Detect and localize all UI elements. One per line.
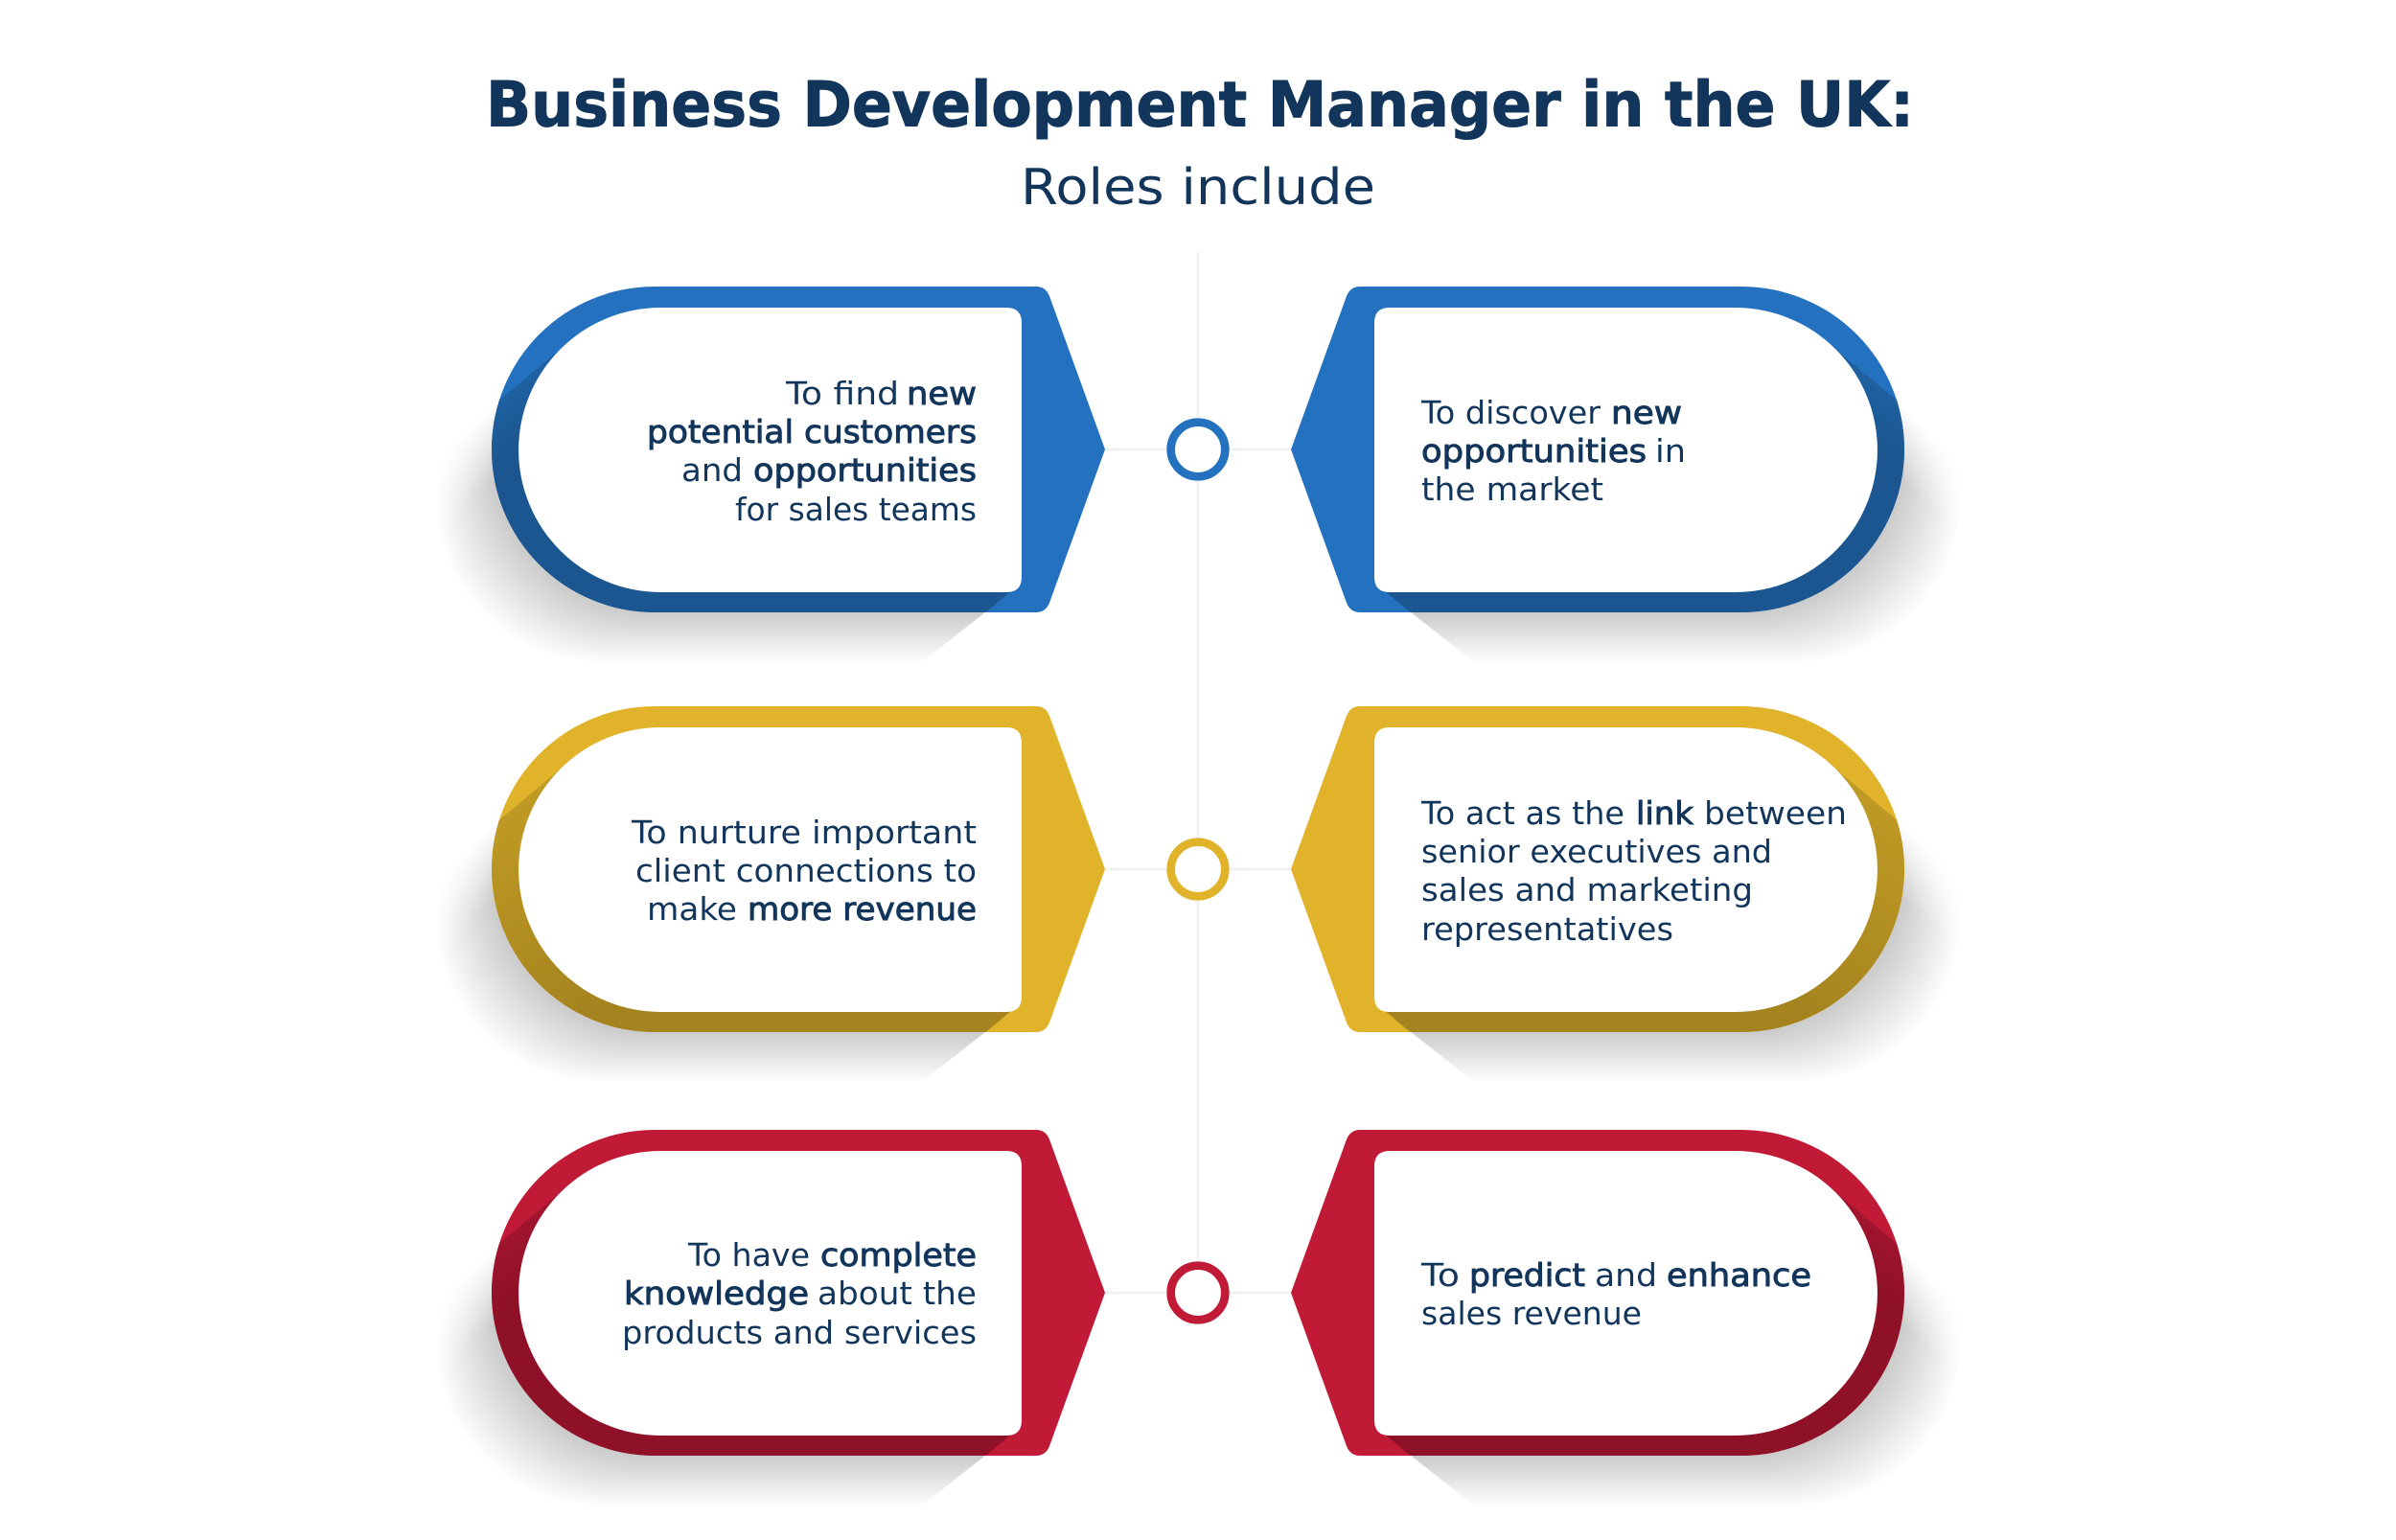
text: predict and enhance: sales revenue [1421, 1295, 1642, 1332]
text: find new customers: and [681, 451, 743, 489]
card shape: yellow right [1267, 706, 1959, 1092]
panel: nurture client connections [437, 706, 1129, 1092]
central timeline [1105, 252, 1291, 1293]
text: complete knowledge: about the [818, 1275, 977, 1312]
card shape: blue left [437, 287, 1129, 672]
text: act as the link: senior executives and [1421, 833, 1772, 870]
text: nurture client connections: To nurture important [631, 814, 977, 851]
ring marker: yellow [1171, 842, 1225, 896]
text: act as the link: between [1704, 794, 1847, 832]
text: nurture client connections: more revenue [748, 890, 977, 928]
text: nurture client connections: client connections to [635, 852, 977, 889]
text: discover opportunities: opportunities [1421, 432, 1647, 470]
text: predict and enhance: predict [1469, 1256, 1585, 1294]
text: find new customers: potential customers [647, 413, 977, 450]
text: act as the link: representatives [1421, 910, 1673, 948]
text: predict and enhance [1420, 1256, 1811, 1332]
card shape: red left [437, 1130, 1129, 1515]
text: complete knowledge: To have [687, 1236, 810, 1274]
text: nurture client connections [631, 814, 977, 928]
text: discover opportunities: To discover [1420, 394, 1601, 431]
text: discover opportunities: in [1655, 432, 1686, 470]
text: find new customers: new [907, 375, 977, 412]
card shape: blue right [1267, 287, 1959, 672]
text: find new customers [647, 375, 977, 528]
text: discover opportunities: new [1611, 394, 1682, 431]
card shape: red right [1267, 1130, 1959, 1515]
ring marker: red [1171, 1266, 1225, 1320]
card shape: yellow left [437, 706, 1129, 1092]
text: predict and enhance: and [1595, 1256, 1657, 1294]
panel: discover opportunities [1267, 287, 1959, 672]
title: Business Development Manager in the UK: [486, 69, 1914, 142]
text: complete knowledge: knowledge [624, 1275, 809, 1312]
text: complete knowledge: products and services [622, 1314, 977, 1351]
text: predict and enhance: enhance [1667, 1256, 1811, 1294]
text: act as the link: To act as the [1420, 794, 1624, 832]
text: discover opportunities [1420, 394, 1686, 508]
panel: act as the link [1267, 706, 1959, 1092]
text: complete knowledge [622, 1236, 977, 1351]
text: act as the link [1420, 794, 1847, 948]
text: act as the link: link [1636, 794, 1694, 832]
text: nurture client connections: make [647, 890, 737, 928]
text: find new customers: for sales teams [735, 491, 977, 528]
text: find new customers: opportunities [753, 451, 977, 489]
panel: predict and enhance [1267, 1130, 1959, 1515]
ring marker: blue [1171, 423, 1225, 476]
text: find new customers: To find [785, 375, 899, 412]
text: discover opportunities: the market [1421, 471, 1603, 508]
text: act as the link: sales and marketing [1421, 871, 1753, 908]
text: predict and enhance: To [1420, 1256, 1460, 1294]
panel: find new customers [437, 287, 1129, 672]
text: complete knowledge: complete [820, 1236, 977, 1274]
subtitle: Roles include [1021, 159, 1375, 217]
panel: complete knowledge [437, 1130, 1129, 1515]
